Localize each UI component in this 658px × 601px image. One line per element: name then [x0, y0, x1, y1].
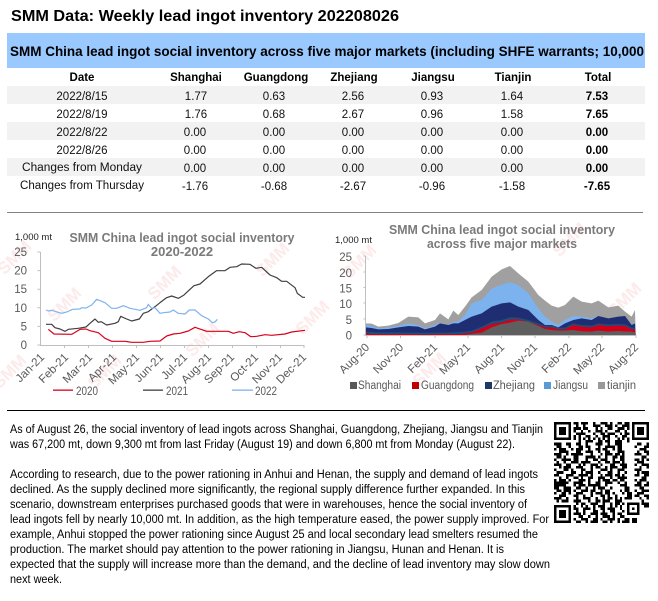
row 2022/8/26: 0.00	[184, 145, 206, 157]
y axis labels	[339, 252, 352, 342]
x axis labels: Dec-21	[274, 352, 309, 386]
row 2022/8/22	[56, 127, 608, 139]
row changes from Thursday: -7.65	[584, 181, 611, 193]
x axis labels: Aug-21	[179, 352, 214, 386]
x axis labels: Mar-21	[61, 352, 95, 386]
row changes from Monday: 0.00	[342, 163, 364, 175]
y axis unit: 1,000 mt	[15, 232, 52, 243]
title: SMM Data: Weekly lead ingot inventory 202208026	[11, 8, 399, 25]
commentary text block	[9, 424, 550, 586]
row 2022/8/15: 0.63	[263, 91, 285, 103]
row changes from Monday: 0.00	[184, 163, 206, 175]
y axis labels: 20	[14, 266, 27, 278]
y axis labels: 5	[21, 322, 27, 334]
chart title: 2020-2022	[151, 244, 213, 259]
row 2022/8/22: 0.00	[586, 127, 608, 139]
panel: line chart 2020-2022	[0, 230, 333, 398]
y axis labels: 25	[14, 247, 27, 259]
axes	[364, 256, 636, 338]
row changes from Monday	[22, 162, 608, 175]
legend: tianjin	[607, 380, 636, 392]
table header row: Total	[585, 72, 611, 84]
row 2022/8/19: 7.65	[586, 109, 609, 121]
row 2022/8/22: 0.00	[421, 127, 443, 139]
table header row: Date	[70, 72, 94, 84]
y axis labels: 25	[339, 252, 352, 264]
commentary text block: was 67,200 mt, down 9,300 mt from last Friday (August 19) and down 6,800 mt from Monday (August 22).	[9, 439, 515, 451]
QR code	[554, 422, 649, 523]
area: Zhejiang	[366, 302, 636, 335]
inventory data table	[7, 72, 645, 193]
row changes from Thursday: -1.58	[499, 181, 525, 193]
x axis labels: Jan-21	[14, 352, 47, 385]
y axis labels: 10	[14, 303, 27, 315]
table header row	[70, 72, 611, 84]
legend	[53, 386, 277, 398]
x axis labels: Jun-21	[133, 352, 166, 385]
panel: line chart 2020-2022: SMM	[144, 262, 185, 303]
y axis labels: 0	[346, 330, 352, 342]
table header row: Zhejiang	[330, 72, 378, 84]
x axis labels: Aug-21	[472, 342, 507, 376]
row 2022/8/19: 2.67	[342, 109, 364, 121]
row 2022/8/15: 1.64	[501, 91, 524, 103]
x axis labels	[14, 352, 309, 387]
legend: 2021	[166, 386, 188, 398]
panel: line chart 2020-2022: SMM	[182, 319, 223, 360]
row changes from Thursday: -2.67	[340, 181, 366, 193]
commentary text block: According to research, due to the power rationing in Anhui and Henan, the supply and demand of lead ingots	[10, 469, 538, 481]
x axis labels: Nov-20	[371, 342, 406, 376]
row 2022/8/15: 2022/8/15	[56, 91, 108, 103]
x axis labels: May-21	[107, 352, 142, 387]
legend: Jiangsu	[553, 380, 588, 392]
x axis labels: Feb-21	[406, 342, 440, 376]
row changes from Thursday	[20, 180, 611, 193]
panel: stacked area chart: SMM	[339, 241, 380, 282]
row changes from Monday: 0.00	[421, 163, 443, 175]
row 2022/8/15: 7.53	[586, 91, 608, 103]
x axis labels: Feb-22	[540, 342, 574, 376]
axes	[38, 252, 304, 348]
y axis labels: 15	[14, 284, 27, 296]
row 2022/8/19: 1.58	[501, 109, 523, 121]
area: Zhejiang lower band	[366, 317, 636, 335]
panel: line chart 2020-2022: SMM	[292, 297, 333, 338]
table banner heading: SMM China lead ingot social inventory across five major markets (including SHFE warrants; 10,000	[10, 44, 644, 59]
x axis labels: Feb-21	[37, 352, 71, 386]
legend: Zhejiang	[493, 380, 535, 392]
commentary text block: expected that the supply will increase more than the demand, and the decline of lead inventory may slow down	[10, 559, 550, 571]
row changes from Monday: 0.00	[501, 163, 523, 175]
legend: Guangdong	[421, 380, 474, 392]
commentary text block: lead ingots fell by nearly 10,000 mt. In addition, as the high temperature eased, the power supply improved. For	[10, 514, 549, 526]
row 2022/8/19: 1.76	[185, 109, 207, 121]
chart title	[389, 222, 616, 251]
x axis labels: Aug-22	[606, 342, 641, 376]
commentary text block: As of August 26, the social inventory of lead ingots across Shanghai, Guangdong, Zhejiang, Jiangsu and Tianjin	[10, 424, 543, 436]
row 2022/8/19	[56, 109, 609, 121]
row 2022/8/15	[56, 91, 608, 103]
row 2022/8/22: 2022/8/22	[56, 127, 108, 139]
table header row: Guangdong	[244, 72, 308, 84]
panel: line chart 2020-2022: SMM	[252, 239, 293, 280]
table header row: Tianjin	[495, 72, 531, 84]
row 2022/8/22: 0.00	[501, 127, 523, 139]
area: Shanghai	[465, 321, 636, 335]
x axis labels: May-22	[572, 342, 607, 377]
panel: line chart 2020-2022: SMM	[84, 351, 125, 392]
row 2022/8/15: 0.93	[421, 91, 443, 103]
x axis labels: Sep-21	[202, 352, 237, 386]
y axis labels: 10	[339, 299, 352, 311]
line series	[46, 264, 305, 342]
legend: 2020	[76, 386, 98, 398]
x axis labels: Nov-21	[250, 352, 285, 386]
area: Guangdong	[366, 319, 636, 335]
row 2022/8/26: 0.00	[501, 145, 523, 157]
y axis labels: 5	[346, 315, 352, 327]
row changes from Thursday: Changes from Thursday	[20, 180, 144, 192]
y axis labels: 15	[339, 284, 352, 296]
series 2020	[48, 327, 305, 342]
row changes from Monday: 0.00	[263, 163, 285, 175]
stacked areas	[366, 266, 636, 335]
x axis labels: Nov-21	[505, 342, 540, 376]
panel: stacked area chart: SMM	[549, 219, 590, 260]
x axis labels	[337, 342, 641, 377]
chart title: SMM China lead ingot social inventory	[389, 222, 616, 237]
area: tianjin	[366, 266, 636, 335]
area: Jiangsu	[366, 282, 636, 335]
row 2022/8/15: 1.77	[185, 91, 207, 103]
table header row: Jiangsu	[411, 72, 455, 84]
y axis labels	[14, 247, 27, 352]
y axis unit: 1,000 mt	[335, 235, 372, 246]
row 2022/8/15: 2.56	[342, 91, 364, 103]
row changes from Thursday: -1.76	[182, 181, 208, 193]
row 2022/8/26: 0.00	[263, 145, 285, 157]
commentary text block: scenario, downstream enterprises purchased goods that were in warehouses, hence the social inventory of	[10, 499, 528, 511]
chart title: across five major markets	[427, 236, 577, 251]
x axis labels: Apr-21	[86, 352, 119, 385]
row changes from Monday: Changes from Monday	[22, 162, 142, 174]
row 2022/8/26: 0.00	[586, 145, 608, 157]
commentary text block: production. The market should pay attention to the power rationing in Jiangsu, Hunan and Henan. It is	[10, 544, 504, 556]
legend: Shanghai	[358, 380, 401, 392]
row changes from Thursday: -0.68	[261, 181, 287, 193]
y axis labels: 0	[21, 340, 27, 352]
table header row: Shanghai	[170, 72, 222, 84]
row 2022/8/22: 0.00	[184, 127, 206, 139]
row 2022/8/26: 2022/8/26	[56, 145, 108, 157]
x axis labels: Aug-20	[337, 342, 372, 376]
commentary text block: example, Anhui stopped the power rationing since August 25 and local secondary lead smelters resumed the	[10, 529, 538, 541]
panel: stacked area chart	[335, 219, 645, 392]
row changes from Thursday: -0.96	[419, 181, 445, 193]
chart title	[70, 230, 295, 259]
row changes from Monday: 0.00	[586, 163, 608, 175]
row 2022/8/22: 0.00	[342, 127, 364, 139]
x axis labels: May-21	[438, 342, 473, 377]
row 2022/8/19: 0.68	[263, 109, 285, 121]
series 2021	[46, 264, 305, 331]
row 2022/8/19: 2022/8/19	[56, 109, 108, 121]
y axis labels: 20	[339, 268, 352, 280]
panel: stacked area chart: SMM	[409, 349, 450, 390]
x axis labels: Oct-21	[228, 352, 261, 385]
commentary text block: next week.	[10, 574, 62, 586]
legend	[350, 380, 636, 392]
row 2022/8/26	[56, 145, 608, 157]
panel: line chart 2020-2022: SMM	[44, 284, 85, 325]
panel: stacked area chart: SMM	[604, 279, 645, 320]
row 2022/8/22: 0.00	[263, 127, 285, 139]
row 2022/8/26: 0.00	[342, 145, 364, 157]
x axis labels: Jul-21	[159, 352, 190, 382]
row 2022/8/19: 0.96	[421, 109, 443, 121]
legend: 2022	[255, 386, 277, 398]
chart title: SMM China lead ingot social inventory	[70, 230, 295, 245]
series 2022	[46, 299, 217, 323]
table banner heading	[7, 33, 645, 68]
row 2022/8/26: 0.00	[421, 145, 443, 157]
commentary text block: declined. As the supply declined more significantly, the regional supply difference further expanded. In this	[10, 484, 525, 496]
